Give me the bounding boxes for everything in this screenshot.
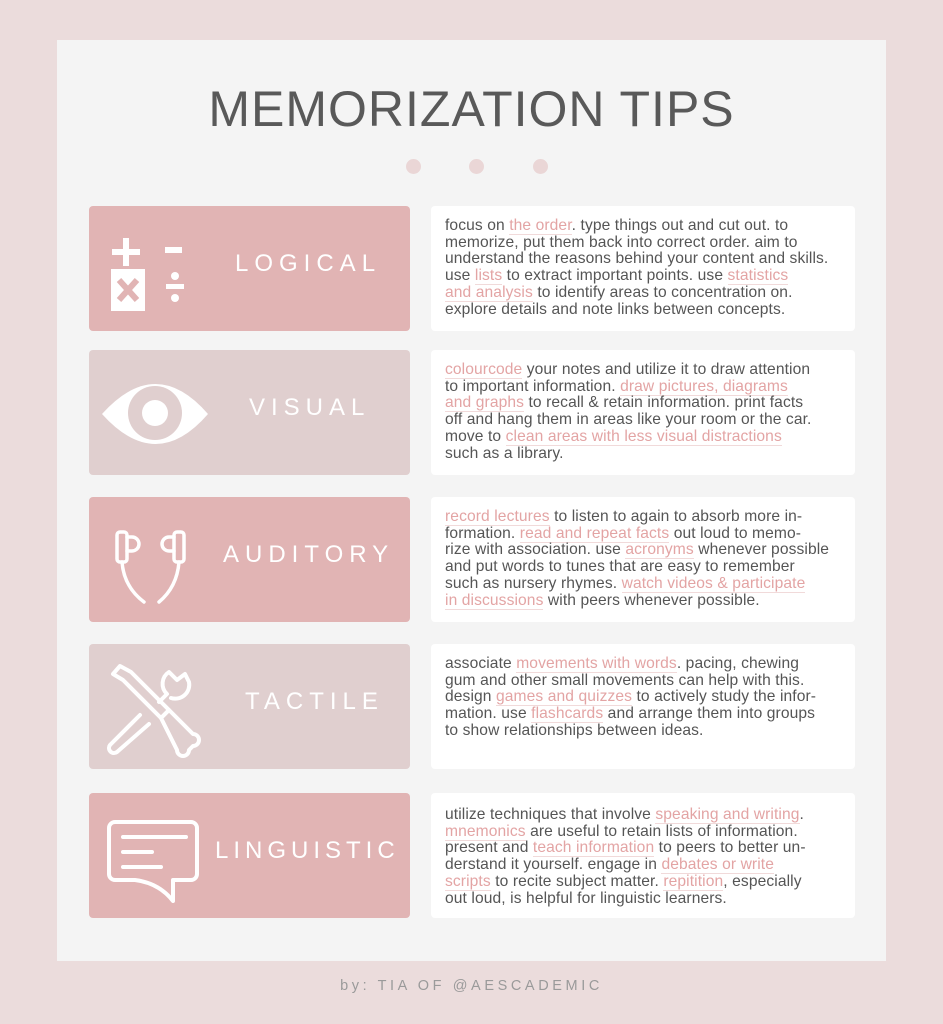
text: linguistic: utilize techniques that involve speaking and writing. <box>445 806 804 823</box>
text: logical: explore details and note links between concepts. <box>445 301 785 318</box>
text: visual: move to clean areas with less visual distractions <box>445 428 782 445</box>
text: visual: to important information. draw pictures, diagrams <box>445 378 788 395</box>
icon: speech bubble <box>107 820 199 903</box>
icon: tools <box>107 664 201 758</box>
text: auditory: record lectures to listen to again to absorb more in- <box>445 508 802 525</box>
label: logical: LOGICAL <box>235 250 381 277</box>
icon: eye <box>102 384 208 444</box>
text: tactile: to show relationships between ideas. <box>445 722 703 739</box>
text: logical <box>431 206 855 331</box>
text: linguistic: scripts to recite subject matter. repitition, especially <box>445 873 802 890</box>
label: auditory: AUDITORY <box>223 541 394 568</box>
text: logical: and analysis to identify areas to concentration on. <box>445 284 793 301</box>
text: linguistic: present and teach information to peers to better un- <box>445 839 806 856</box>
label: tactile: TACTILE <box>245 688 384 715</box>
text: auditory: rize with association. use acronyms whenever possible <box>445 541 829 558</box>
card background <box>57 40 886 961</box>
text: auditory: and put words to tunes that are easy to remember <box>445 558 795 575</box>
decorative dots <box>406 159 548 174</box>
text: tactile: associate movements with words. pacing, chewing <box>445 655 799 672</box>
panel: logical label <box>89 206 410 331</box>
label: visual: VISUAL <box>249 394 370 421</box>
text: visual: off and hang them in areas like your room or the car. <box>445 411 811 428</box>
footer credit: by: TIA OF @AESCADEMIC <box>340 978 603 994</box>
text: linguistic: mnemonics are useful to retain lists of information. <box>445 823 798 840</box>
panel: auditory label <box>89 497 410 622</box>
title: MEMORIZATION TIPS <box>208 81 735 137</box>
panel: tactile label <box>89 644 410 769</box>
icon: math symbols <box>111 238 184 311</box>
text: linguistic: derstand it yourself. engage in debates or write <box>445 856 774 873</box>
text: tactile: gum and other small movements can help with this. <box>445 672 804 689</box>
text: auditory: formation. read and repeat facts out loud to memo- <box>445 525 801 542</box>
text: linguistic <box>431 793 855 918</box>
text: auditory: such as nursery rhymes. watch videos & participate <box>445 575 805 592</box>
text: visual <box>431 350 855 475</box>
text: logical: understand the reasons behind your content and skills. <box>445 250 828 267</box>
text: auditory <box>431 497 855 622</box>
text: auditory: in discussions with peers whenever possible. <box>445 592 760 609</box>
icon: earphones <box>115 530 186 604</box>
text: tactile <box>431 644 855 769</box>
text: visual: and graphs to recall & retain information. print facts <box>445 394 803 411</box>
text: linguistic: out loud, is helpful for linguistic learners. <box>445 890 727 907</box>
text: visual: such as a library. <box>445 445 564 462</box>
panel: linguistic label <box>89 793 410 918</box>
text: logical: use lists to extract important points. use statistics <box>445 267 788 284</box>
text: logical: focus on the order. type things out and cut out. to <box>445 217 788 234</box>
text: logical: memorize, put them back into correct order. aim to <box>445 234 798 251</box>
text: visual: colourcode your notes and utilize it to draw attention <box>445 361 810 378</box>
panel: visual label <box>89 350 410 475</box>
label: linguistic: LINGUISTIC <box>215 837 400 864</box>
text: tactile: design games and quizzes to actively study the infor- <box>445 688 816 705</box>
text: tactile: mation. use flashcards and arrange them into groups <box>445 705 815 722</box>
